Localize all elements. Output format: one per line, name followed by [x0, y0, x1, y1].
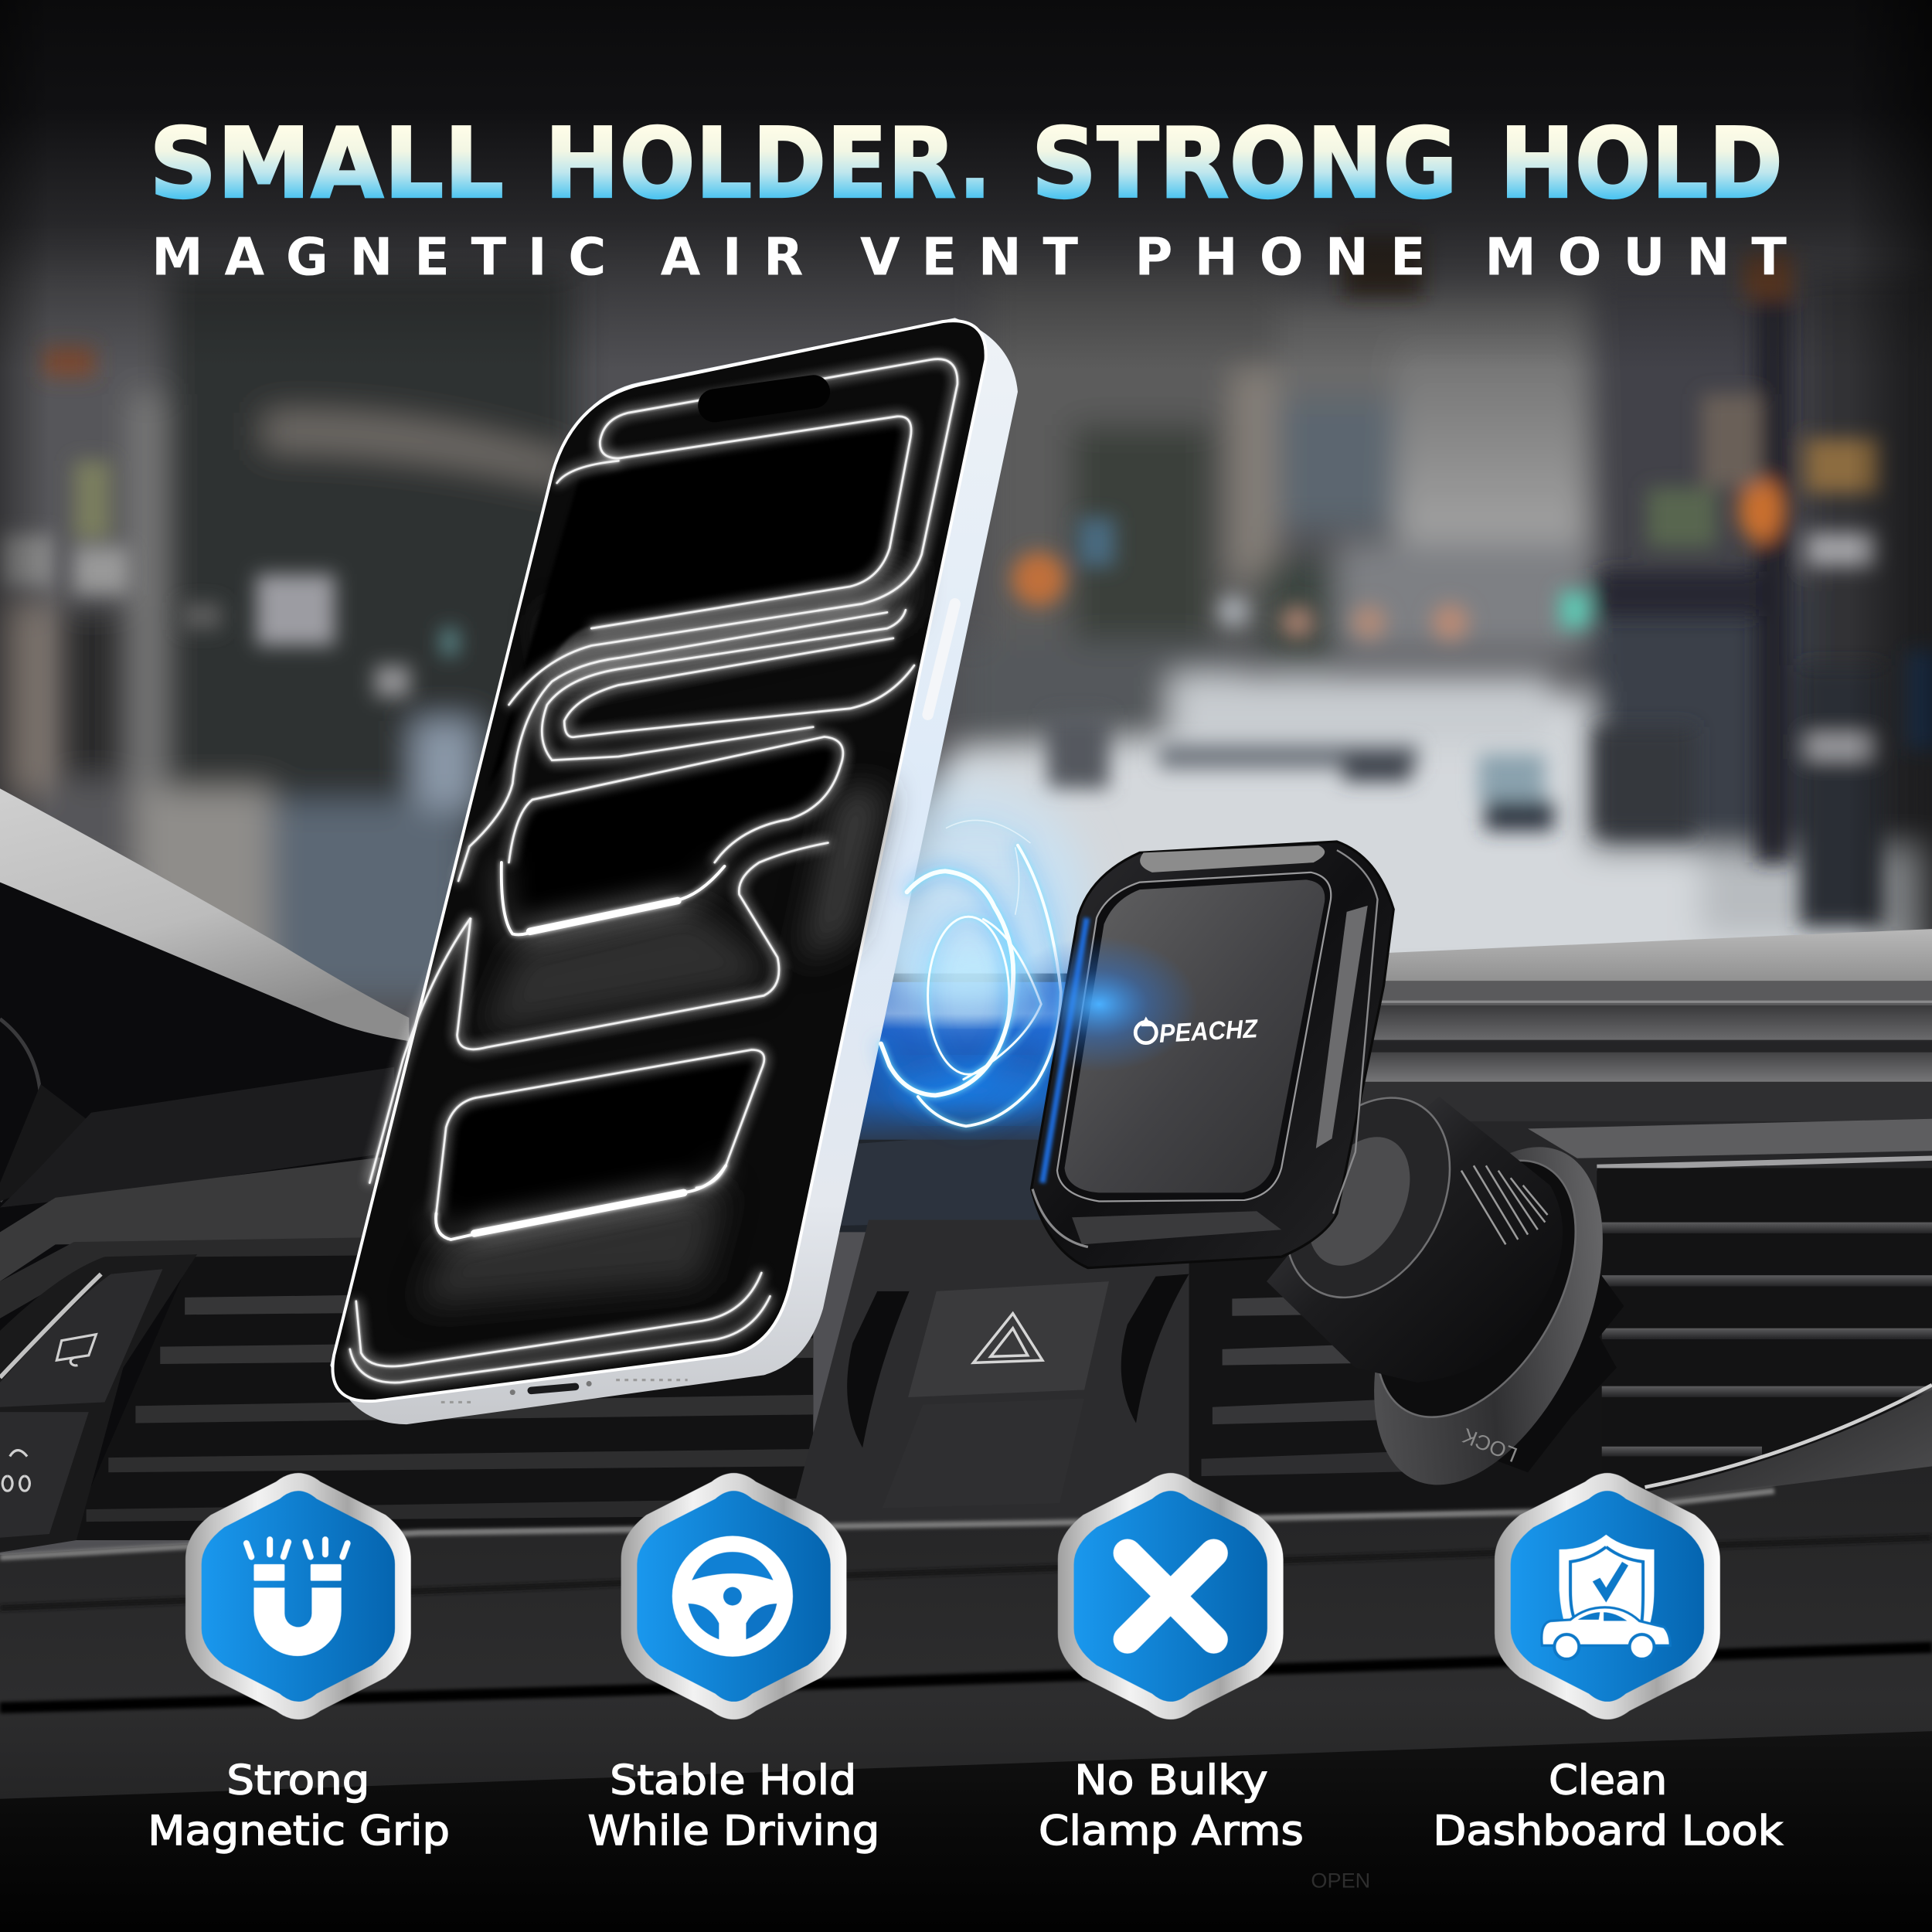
hazard button [883, 1281, 1109, 1509]
vehicle icons [2, 1335, 96, 1491]
open label on dash: OPEN [1311, 1869, 1370, 1893]
lower dashboard [0, 1466, 1932, 1932]
mount base clips [1478, 1269, 1624, 1472]
mount barrel [1267, 1097, 1563, 1383]
phone bottom port [441, 1380, 688, 1402]
console lower panel [788, 1219, 1232, 1528]
feature: clean dashboard look [1433, 1473, 1784, 1855]
console blue reflections [825, 1128, 1084, 1226]
phone silver body [330, 318, 1018, 1424]
screen bright lower edge: upper panel [502, 862, 725, 934]
icon: shield and car [1542, 1535, 1670, 1659]
subtitle: PHONE [1134, 227, 1426, 287]
plate corner highlight [1333, 850, 1378, 1213]
centre console upper [813, 974, 1084, 1232]
screen contour lines [350, 359, 957, 1383]
plate top grey tab [1140, 845, 1325, 872]
left button panel [0, 1254, 197, 1553]
plate inner rim [1057, 872, 1331, 1202]
title: STRONG [1032, 107, 1458, 220]
plate bottom-left highlight [1032, 1189, 1088, 1247]
right dashboard strip [1368, 929, 1932, 991]
rear flange [1253, 1070, 1483, 1326]
lock label: LOCK [1459, 1423, 1521, 1468]
icon: magnet [247, 1539, 348, 1656]
chrome trim [0, 1274, 101, 1378]
dashboard highlight line [0, 1491, 1774, 1557]
title: SMALL [149, 107, 504, 220]
feature: stable hold while driving [588, 1473, 879, 1855]
steering column arc [0, 1019, 41, 1202]
magnetic field glow [813, 776, 1084, 1140]
hexagon badge [1058, 1473, 1284, 1719]
mount plate frame [1032, 842, 1393, 1268]
plate left blue edge [1043, 918, 1087, 1183]
phone [330, 318, 1018, 1424]
subtitle: MOUNT [1485, 227, 1787, 287]
screen dark panels [435, 419, 911, 1242]
subtitle: AIR [661, 227, 804, 287]
curved trim highlight [1645, 1385, 1932, 1487]
upper button [0, 1269, 162, 1407]
left upper trim bands [0, 1067, 394, 1318]
dashboard lower band line [0, 1538, 1932, 1608]
screen bright lower edge: bottom panel [436, 1165, 726, 1240]
label: Strong [226, 1757, 369, 1804]
label: Clean [1549, 1757, 1667, 1804]
feature: strong magnetic grip [148, 1473, 450, 1855]
magnetic mount [1001, 842, 1649, 1519]
phone side button [928, 604, 955, 715]
blue reflection [1001, 937, 1198, 1072]
screen soft grey sheen [419, 560, 912, 1306]
left vents [68, 1252, 813, 1540]
plate bottom ridge [1072, 1211, 1281, 1244]
lower button [0, 1412, 89, 1538]
icon: steering wheel [672, 1536, 793, 1657]
hexagon badge [185, 1473, 411, 1719]
hexagon badge [621, 1473, 846, 1719]
label: While Driving [588, 1808, 879, 1855]
car dashboard [0, 788, 1932, 1932]
lower dash black area [0, 1731, 1932, 1932]
subtitle: MAGNETIC [151, 227, 606, 287]
subtitle: VENT [860, 227, 1078, 287]
plate face [1065, 879, 1325, 1192]
right dashboard stripes and vents [1189, 981, 1932, 1540]
top dark vignette [0, 0, 1932, 369]
console dials [847, 1291, 910, 1447]
dashboard upper left dark area [0, 881, 419, 1528]
magnetic rings [881, 820, 1061, 1126]
label: Stable Hold [610, 1757, 856, 1804]
dashboard groove line [0, 1648, 1932, 1708]
curved trim lower right [1639, 1389, 1932, 1540]
label: Clamp Arms [1039, 1808, 1304, 1855]
phone notch [696, 372, 832, 424]
plate right highlight [1316, 906, 1368, 1148]
windshield pillar [0, 788, 409, 1041]
flange inner ring [1287, 1120, 1430, 1283]
label: Magnetic Grip [148, 1808, 450, 1855]
barrel grip ribs [1461, 1165, 1548, 1244]
feature: no bulky clamp arms [1039, 1473, 1304, 1855]
title: HOLDER. [545, 107, 992, 220]
label: Dashboard Look [1433, 1808, 1784, 1855]
barrel end [1335, 1127, 1617, 1451]
icon: cross [1128, 1553, 1213, 1639]
hexagon badge [1495, 1473, 1720, 1719]
mount base disc [1328, 1113, 1649, 1519]
label: No Bulky [1074, 1757, 1268, 1804]
title: HOLD [1499, 107, 1783, 220]
peachz logo: PEACHZ [1158, 1015, 1260, 1049]
phone screen [332, 321, 986, 1401]
